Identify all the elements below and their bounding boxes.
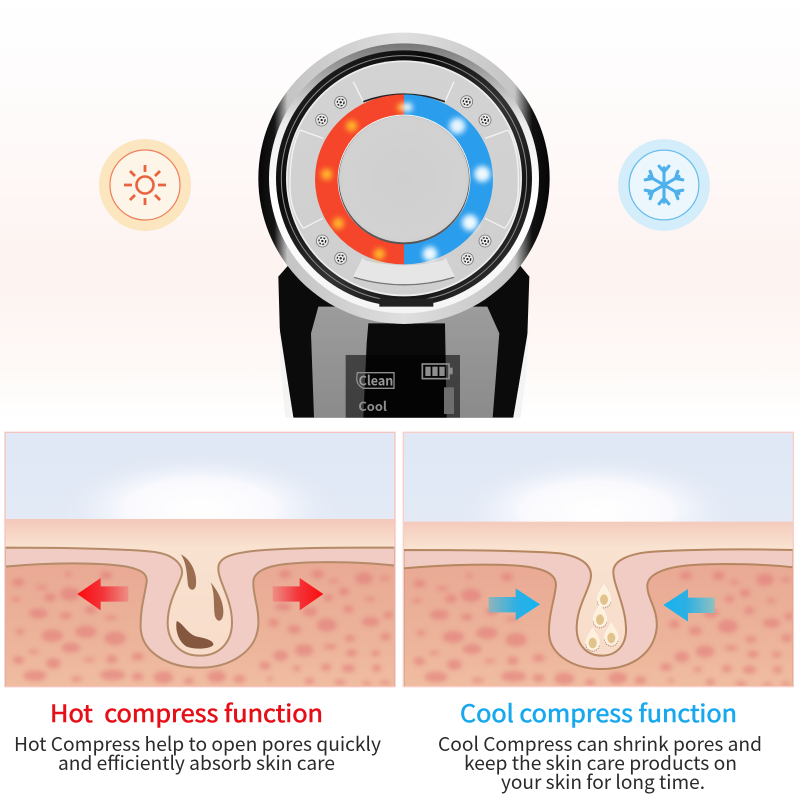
panel: hot compress skin diagram — [5, 432, 395, 692]
icon: cold snowflake badge — [618, 139, 710, 231]
arrow: left inward blue — [489, 588, 540, 620]
heading: cool compress: Cool compress function — [460, 694, 737, 729]
screws — [316, 96, 491, 265]
skin surface layer — [404, 522, 793, 655]
serum drops — [586, 585, 618, 651]
text: hot compress description: Hot Compress help to open pores quickly — [14, 730, 381, 757]
heading: hot compress: Hot compress function — [50, 694, 323, 729]
dermis layer — [403, 564, 793, 692]
leds — [321, 103, 490, 261]
epidermis layer — [404, 548, 793, 668]
arrow: right outward red — [273, 578, 323, 610]
arrow: right inward blue — [663, 589, 715, 622]
panel: cool compress skin diagram — [403, 432, 795, 692]
text: hot compress description: and efficiently absorb skin care — [58, 749, 335, 776]
background wash — [0, 0, 800, 418]
text: hot compress description — [14, 730, 381, 776]
icon: hot sun badge — [99, 139, 191, 231]
text: cool compress description: keep the skin care products on — [464, 749, 737, 776]
sky area — [404, 433, 793, 522]
device chrome head — [258, 33, 550, 324]
lcd display — [346, 355, 460, 418]
lcd display: Clean — [359, 370, 393, 389]
epidermis layer — [6, 546, 394, 666]
text: cool compress description: your skin for long time. — [501, 768, 705, 795]
lcd display: Cool — [358, 396, 387, 415]
text: cool compress description: Cool Compress can shrink pores and — [438, 730, 762, 757]
plate segments — [290, 82, 518, 277]
device handle — [278, 263, 529, 418]
sky area — [6, 433, 394, 519]
center metal disc — [338, 115, 470, 244]
device: beauty instrument — [258, 33, 550, 418]
red half ring — [315, 94, 404, 264]
arrow: left outward red — [77, 578, 128, 610]
skin surface layer — [6, 519, 394, 655]
text: cool compress description — [438, 730, 762, 795]
dermis layer — [5, 562, 395, 692]
blue half ring — [404, 94, 493, 264]
sebum deposits — [176, 554, 223, 649]
